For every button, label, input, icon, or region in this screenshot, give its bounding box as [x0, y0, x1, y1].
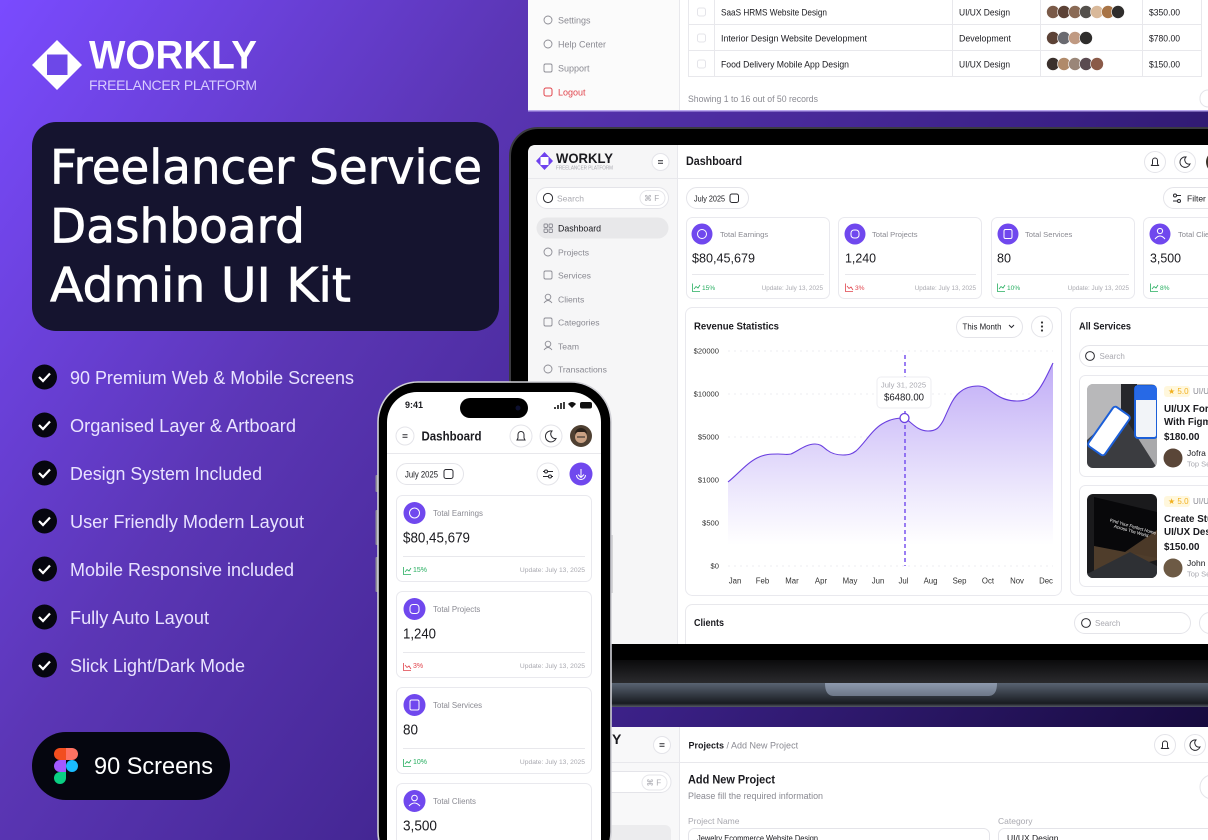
phone card: total clients: 3,500 — [403, 818, 437, 834]
projects table: $150.00 — [1149, 60, 1180, 70]
phone filter button — [537, 463, 559, 485]
stat card: total earnings: 15% — [702, 285, 715, 292]
pagination caption: Showing 1 to 16 out of 50 records — [688, 94, 818, 104]
phone card: total projects: 1,240 — [403, 626, 436, 642]
icon: diamond — [32, 40, 82, 90]
feature list — [32, 364, 354, 678]
feature: dark mode — [32, 652, 245, 678]
phone card: total earnings: $80,45,679 — [403, 530, 470, 546]
projects table — [688, 0, 1202, 76]
panel: bottom add new project screen: Please fill the required information — [688, 791, 823, 801]
nav links: Projects — [558, 248, 589, 258]
phone card: total projects — [396, 592, 592, 678]
services search — [1080, 346, 1208, 366]
projects table: Development — [959, 34, 1011, 44]
icon: figma — [54, 748, 78, 784]
sidebar: Dashboard — [558, 224, 601, 234]
stat card: total services: 80 — [997, 250, 1011, 266]
nav active dashboard — [536, 218, 668, 238]
feature: auto layout: Fully Auto Layout — [70, 607, 209, 628]
stat card: total services: 10% — [1007, 285, 1020, 292]
title text: Dashboard — [50, 200, 305, 254]
y axis labels: $500 — [702, 518, 719, 528]
area curve — [728, 363, 1053, 545]
service card 1: ★ 5.0 — [1168, 387, 1189, 396]
services search: Search — [1100, 352, 1125, 361]
date filter — [686, 188, 748, 208]
stat card: total clients: 8% — [1160, 285, 1170, 292]
service card 2: Across The World — [1113, 524, 1149, 538]
stat card: total earnings — [686, 218, 830, 298]
panel: clients: Clients — [694, 617, 724, 629]
feature: responsive: Mobile Responsive included — [70, 559, 294, 580]
status bar — [405, 398, 592, 418]
title text — [50, 140, 482, 314]
tooltip — [877, 377, 931, 408]
panel: clients — [686, 604, 1208, 644]
sidebar links — [544, 16, 606, 98]
panel: top projects table screen — [528, 0, 1208, 112]
stat card: total projects: Update: July 13, 2025 — [915, 285, 976, 292]
x axis labels: Jun — [872, 576, 884, 586]
phone card: total services: 10% — [413, 759, 427, 766]
projects table: Food Delivery Mobile App Design — [721, 60, 849, 70]
service card 2: ★ 5.0 — [1168, 497, 1189, 506]
logo: workly: WORKLY — [89, 34, 257, 78]
phone card: total clients — [396, 784, 592, 840]
logo: workly: FREELANCER PLATFORM — [89, 77, 257, 93]
badge: 90 screens — [32, 732, 230, 800]
laptop mockup — [510, 128, 1208, 707]
y axis labels: $5000 — [698, 432, 719, 442]
phone mockup — [376, 382, 612, 840]
service card 1 — [1080, 376, 1208, 476]
y axis labels: $1000 — [698, 476, 719, 484]
stat card: total clients: 3,500 — [1150, 250, 1181, 266]
x axis labels — [729, 576, 1053, 586]
projects table: Interior Design Website Development — [721, 34, 867, 44]
panel: clients: Search — [1095, 619, 1120, 628]
phone screen — [387, 392, 601, 840]
logo: workly dark — [536, 150, 614, 172]
logo: workly — [32, 34, 257, 93]
x axis labels: Apr — [815, 576, 827, 586]
x axis labels: Oct — [982, 576, 995, 586]
search input — [536, 188, 668, 208]
x axis labels: Mar — [785, 576, 799, 586]
service card 1: $180.00 — [1164, 432, 1200, 443]
logo: workly dark: WORKLY — [556, 150, 614, 166]
stat card: total services: Total Services — [1025, 230, 1072, 239]
stat card: total projects: 3% — [855, 285, 865, 292]
nav links: Clients — [558, 294, 584, 304]
x axis labels: Nov — [1010, 576, 1024, 586]
projects table: UI/UX Design — [959, 8, 1010, 18]
x axis labels: Jul — [899, 576, 909, 586]
laptop bezel — [510, 128, 1208, 668]
laptop screen — [528, 145, 1208, 644]
stat card: total clients — [1144, 218, 1208, 298]
phone card: total services: 80 — [403, 722, 418, 738]
sidebar links: Help Center — [558, 40, 606, 50]
projects table: UI/UX Design — [959, 60, 1010, 70]
panel: bottom add new project screen: ⌘ F — [646, 778, 661, 788]
nav links — [544, 248, 607, 374]
panel: all services: All Services — [1079, 320, 1131, 332]
period dropdown: This Month — [962, 322, 1002, 332]
x axis labels: Sep — [953, 576, 967, 586]
x axis labels: Aug — [924, 576, 937, 586]
stat cards — [686, 218, 1208, 298]
stat card: total earnings: $80,45,679 — [692, 250, 755, 266]
sidebar links: Logout — [558, 88, 586, 98]
phone card: total earnings: Update: July 13, 2025 — [520, 567, 585, 574]
logo: workly dark: FREELANCER PLATFORM — [556, 166, 613, 172]
title text: Admin UI Kit — [50, 258, 351, 314]
y axis labels: $10000 — [694, 390, 719, 398]
form fields — [688, 816, 1208, 840]
feature: dark mode: Slick Light/Dark Mode — [70, 655, 245, 676]
search input: ⌘ F — [644, 194, 659, 203]
panel: bottom add new project screen — [528, 727, 1208, 840]
sidebar — [528, 145, 1208, 644]
phone card: total earnings: 15% — [413, 567, 427, 574]
x axis labels: Jan — [729, 576, 741, 586]
date filter: July 2025 — [694, 194, 725, 204]
form fields: Project Name — [688, 816, 740, 826]
x axis labels: Dec — [1039, 576, 1053, 586]
phone card: total services — [396, 688, 592, 774]
stat card: total projects: Total Projects — [872, 230, 918, 239]
service card 2 — [1080, 486, 1208, 586]
phone card: total services: Update: July 13, 2025 — [520, 759, 585, 766]
sidebar links: Support — [558, 64, 590, 74]
feature: layers: Organised Layer & Artboard — [70, 415, 296, 436]
feature: screens: 90 Premium Web & Mobile Screens — [70, 367, 354, 388]
form heading: Add New Project — [688, 772, 775, 786]
period dropdown — [956, 316, 1022, 338]
nav links: Transactions — [558, 364, 607, 374]
y axis labels: $20000 — [694, 346, 719, 356]
phone frame — [378, 382, 611, 840]
phone card: total clients: Total Clients — [433, 797, 476, 806]
tooltip: $6480.00 — [884, 392, 925, 404]
feature: auto layout — [32, 604, 209, 630]
stat card: total earnings: Total Earnings — [720, 230, 768, 239]
phone header — [387, 425, 601, 454]
y axis labels — [694, 346, 719, 570]
service card 2: $150.00 — [1164, 542, 1200, 553]
phone card: total services: Total Services — [433, 701, 482, 710]
stat card: total services — [992, 218, 1134, 298]
y axis labels: $0 — [711, 562, 719, 570]
nav links: Team — [558, 342, 579, 352]
stat card: total projects — [838, 218, 982, 298]
tooltip: July 31, 2025 — [881, 380, 926, 390]
stat card: total services: Update: July 13, 2025 — [1068, 285, 1129, 292]
panel: all services — [1070, 308, 1208, 596]
avatars — [1046, 6, 1124, 70]
x axis labels: Feb — [756, 576, 770, 586]
nav links: Services — [558, 270, 591, 280]
phone card: total earnings — [396, 496, 592, 582]
service card 2: Find Your Perfect Home — [1109, 518, 1157, 536]
more menu — [1032, 316, 1052, 337]
search input: Search — [557, 194, 584, 204]
form fields: Category — [998, 816, 1033, 826]
phone date pill: July 2025 — [405, 470, 438, 480]
panel: bottom add new project screen: Y — [612, 731, 622, 747]
status bar: 9:41 — [405, 400, 423, 410]
badge: 90 screens: 90 Screens — [94, 753, 213, 780]
laptop hinge and base — [510, 644, 1208, 707]
nav links: Categories — [558, 318, 600, 328]
phone header: Dashboard — [422, 428, 482, 444]
phone side buttons — [376, 475, 612, 593]
projects table: $350.00 — [1149, 8, 1180, 18]
phone card: total projects: Update: July 13, 2025 — [520, 663, 585, 670]
sidebar links: Settings — [558, 16, 591, 26]
header title: Dashboard — [686, 156, 742, 168]
chart title: Revenue Statistics — [694, 320, 779, 332]
phone card: total projects: 3% — [413, 663, 423, 670]
breadcrumb: Projects / Add New Project — [688, 740, 799, 750]
header buttons — [1144, 151, 1208, 173]
phone card: total projects: Total Projects — [433, 605, 480, 614]
phone date pill — [396, 464, 464, 484]
feature: design system — [32, 460, 262, 486]
projects table: SaaS HRMS Website Design — [721, 8, 827, 18]
phone download button — [570, 462, 592, 486]
feature: design system: Design System Included — [70, 463, 262, 484]
phone card: total earnings: Total Earnings — [433, 509, 483, 518]
panel: revenue statistics chart — [686, 308, 1062, 596]
feature: layout: User Friendly Modern Layout — [70, 511, 304, 532]
x axis labels: May — [843, 576, 857, 586]
title text: Freelancer Service — [50, 140, 482, 196]
stat card: total projects: 1,240 — [845, 250, 876, 266]
title panel — [32, 122, 499, 331]
filter button — [1164, 188, 1208, 208]
projects table: $780.00 — [1149, 34, 1180, 44]
filter button: Filter — [1187, 194, 1206, 204]
stat card: total earnings: Update: July 13, 2025 — [762, 285, 823, 292]
